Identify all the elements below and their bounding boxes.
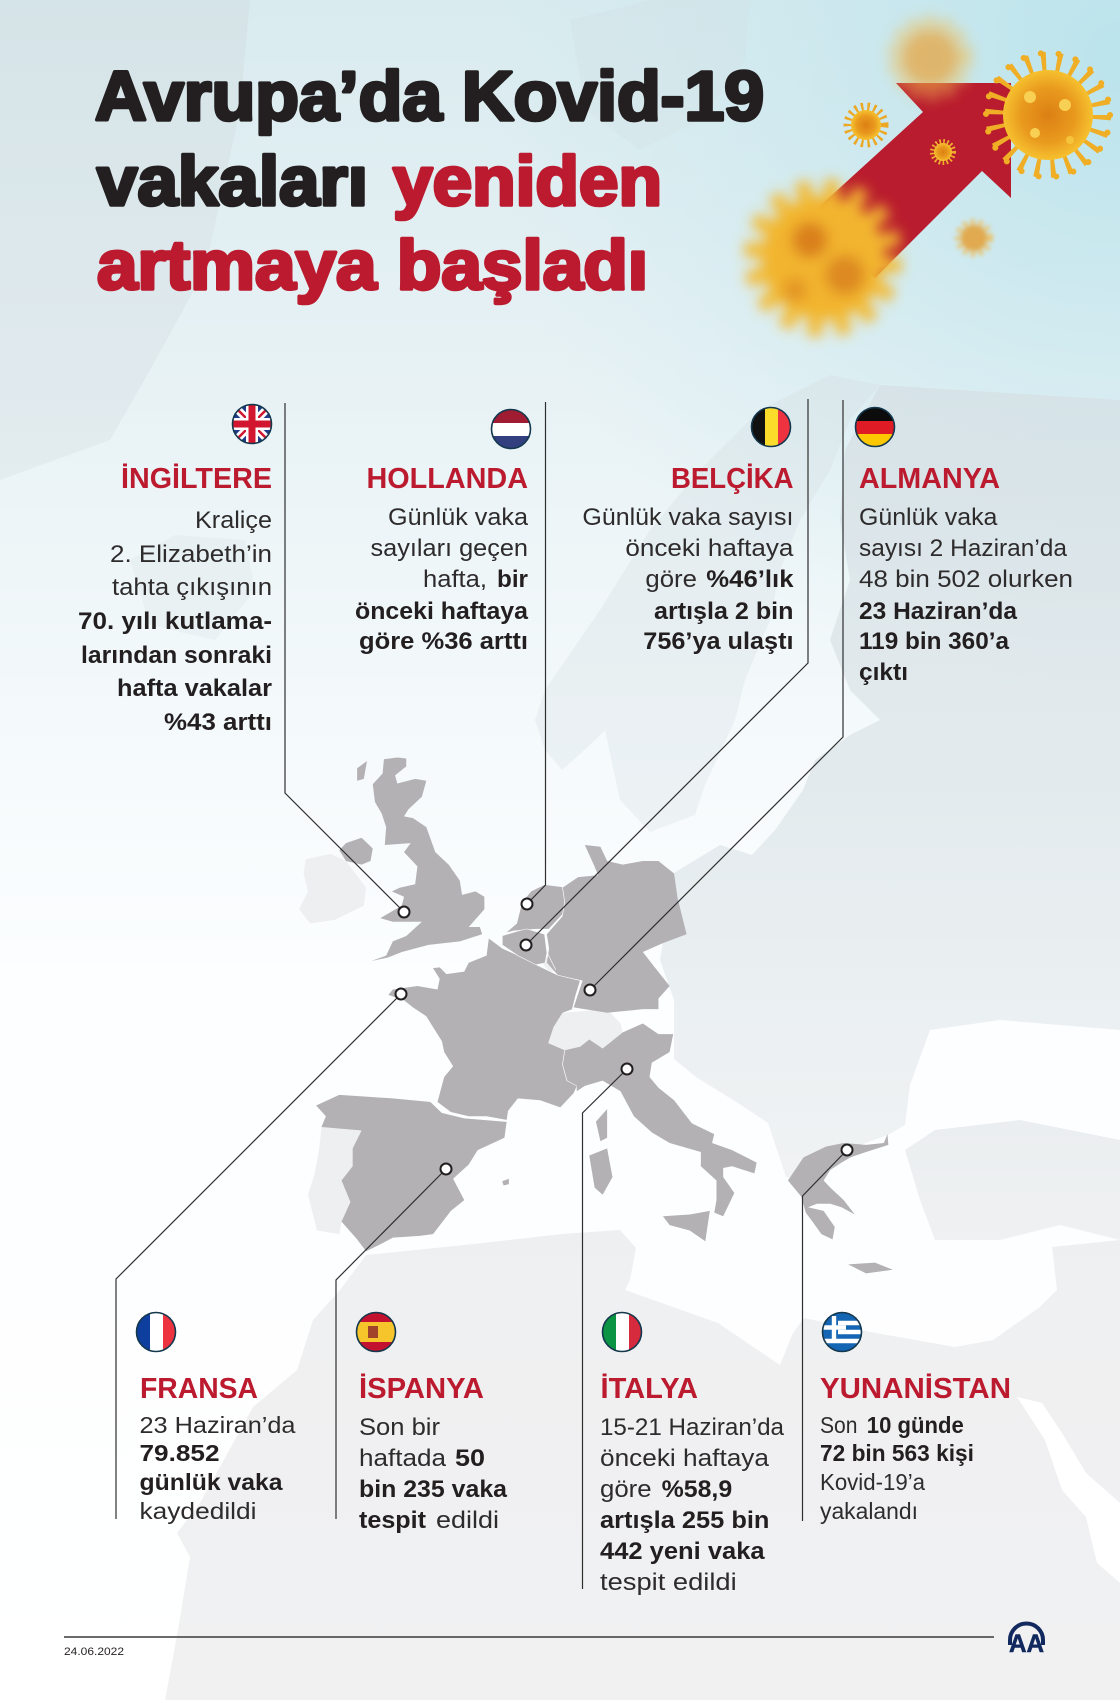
virus: small on arrow (932, 142, 954, 162)
panel: Greece: Kovid-19’a (820, 1469, 925, 1495)
panel: Germany: Günlük vaka (859, 504, 998, 531)
icon: AA logo: AA (1009, 1630, 1044, 1658)
panel: Spain: İSPANYA (359, 1373, 484, 1405)
panel: Netherlands: sayıları geçen (370, 535, 528, 562)
panel: Netherlands: önceki haftaya (355, 598, 529, 625)
panel: Germany: 48 bin 502 olurken (859, 566, 1073, 593)
panel: France: günlük vaka (140, 1469, 283, 1495)
panel: Belgium: artışla 2 bin (654, 598, 794, 625)
icon: Greek flag (822, 1312, 862, 1352)
panel: England: 2. Elizabeth’in (110, 541, 272, 568)
panel: England (78, 404, 272, 736)
panel: Spain: edildi (436, 1507, 499, 1534)
panel: Spain: 50 (455, 1445, 485, 1472)
panel: Italy: 442 yeni vaka (600, 1538, 765, 1565)
panel: Greece: 72 bin 563 kişi (820, 1440, 974, 1466)
panel: England: İNGİLTERE (121, 463, 272, 495)
panel: England: Kraliçe (195, 507, 272, 534)
country: Spain (316, 1095, 509, 1251)
icon: Italian flag (602, 1312, 643, 1352)
location markers (396, 898, 852, 1174)
panel: Greece: Son (820, 1412, 858, 1438)
panel: Netherlands (355, 409, 531, 655)
icon: Belgian flag (751, 407, 792, 447)
panel: Italy: 15-21 Haziran’da (600, 1414, 785, 1441)
country: France (388, 938, 580, 1120)
panel: Belgium: %46’lık (706, 566, 794, 593)
map: highlighted countries (299, 757, 893, 1273)
country: United Kingdom (339, 757, 484, 961)
panel: Belgium: önceki haftaya (625, 535, 794, 562)
panel: England: larından sonraki (81, 642, 272, 669)
pale neighbours (299, 854, 623, 1234)
country: Belgium (502, 929, 547, 965)
virus: sharp large (986, 53, 1110, 177)
title: vakaları (97, 142, 368, 220)
panel: Germany: ALMANYA (859, 463, 1000, 495)
panel: Germany: 119 bin 360’a (859, 628, 1010, 655)
panel: Spain: bin 235 vaka (359, 1476, 508, 1503)
illustration: rising arrow with viruses (757, 23, 1110, 324)
panel: Spain: tespit (359, 1507, 426, 1534)
date: 24.06.2022 (64, 1646, 124, 1658)
panel: Germany: 23 Haziran’da (859, 598, 1018, 625)
panel: Germany: sayısı 2 Haziran’da (859, 535, 1068, 562)
panel: Belgium: 756’ya ulaştı (643, 628, 794, 655)
panel: Spain: haftada (359, 1445, 447, 1472)
panel: France: kaydedildi (140, 1498, 256, 1524)
panel: Netherlands: HOLLANDA (366, 463, 528, 495)
virus: blurred top (895, 23, 965, 93)
icon: UK flag (232, 404, 272, 444)
panel: Netherlands: Günlük vaka (388, 504, 529, 531)
panel: Netherlands: hafta, (423, 566, 487, 593)
title: Avrupa’da Kovid-19 (95, 57, 764, 135)
arrow (810, 83, 1011, 278)
panel: England: hafta vakalar (117, 675, 272, 702)
panel: Italy: tespit edildi (600, 1569, 737, 1596)
icon: German flag (855, 407, 895, 448)
country: Italy (562, 1023, 757, 1241)
footer rule (64, 1636, 994, 1638)
panel: France: 23 Haziran’da (140, 1412, 296, 1438)
panel: Italy: %58,9 (662, 1476, 732, 1503)
panel: Spain (356, 1312, 508, 1534)
panel: England: 70. yılı kutlama- (78, 608, 272, 635)
panel: Germany: çıktı (859, 659, 908, 686)
icon: Spanish flag (356, 1312, 396, 1352)
panel: France: 79.852 (140, 1440, 220, 1466)
title: yeniden (393, 142, 662, 220)
panel: Italy: önceki haftaya (600, 1445, 770, 1472)
country: Greece (788, 1134, 893, 1273)
panel: Belgium: Günlük vaka sayısı (582, 504, 793, 531)
panel: France: FRANSA (140, 1373, 258, 1405)
panel: Belgium: göre (645, 566, 697, 593)
panel: Netherlands: göre %36 arttı (359, 628, 528, 655)
panel: Greece: YUNANİSTAN (820, 1373, 1011, 1405)
panel: Greece: 10 günde (867, 1412, 964, 1438)
panel: Belgium (582, 407, 794, 655)
virus: blurred large (757, 192, 889, 324)
country: Germany (547, 845, 687, 1013)
panel: England: tahta çıkışının (112, 574, 272, 601)
country: Netherlands (507, 885, 565, 932)
icon: Dutch flag (491, 409, 531, 450)
panel: France (136, 1312, 296, 1524)
country borders (431, 887, 580, 1122)
panel: England: %43 arttı (164, 709, 272, 736)
leader lines (116, 399, 847, 1589)
panel: Italy (600, 1312, 785, 1596)
panel: Italy: göre (600, 1476, 652, 1503)
panel: Spain: Son bir (359, 1414, 440, 1441)
virus: sharp small left (849, 108, 883, 142)
panel: Greece (820, 1312, 1011, 1524)
panel: Belgium: BELÇİKA (671, 463, 794, 495)
panel: Netherlands: bir (497, 566, 528, 593)
virus: blurred small (958, 222, 990, 254)
panel: Germany (855, 407, 1073, 686)
title: artmaya başladı (97, 226, 648, 304)
icon: French flag (136, 1312, 177, 1352)
panel: Italy: İTALYA (600, 1373, 698, 1405)
panel: Italy: artışla 255 bin (600, 1507, 769, 1534)
panel: Greece: yakalandı (820, 1498, 918, 1524)
title (95, 57, 764, 304)
